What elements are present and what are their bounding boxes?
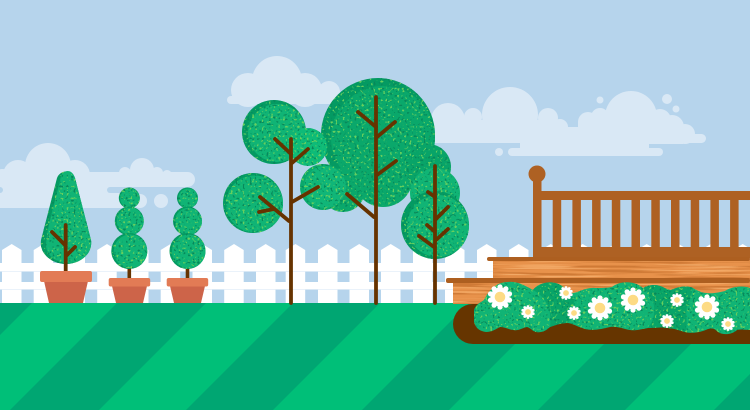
- deck wood planks: [453, 260, 750, 304]
- cloud: upper middle: [227, 56, 340, 107]
- right tree foliage: [401, 144, 469, 259]
- center tree: [321, 78, 435, 303]
- terracotta pot: [167, 278, 208, 303]
- flowers: [488, 284, 735, 331]
- center tree trunk: [347, 97, 396, 303]
- left tree foliage: [223, 100, 346, 233]
- terracotta pot: [40, 271, 92, 303]
- trunk: [186, 265, 189, 279]
- potted ball topiary: middle: [109, 188, 150, 303]
- wooden deck: [446, 166, 750, 304]
- left tree: [223, 100, 346, 303]
- trunk: [128, 265, 131, 279]
- soil bed: [453, 304, 750, 344]
- picket fence: [0, 244, 750, 303]
- cloud: far left: [0, 143, 195, 208]
- deck step edges: [446, 257, 750, 283]
- left tree trunk: [259, 139, 318, 303]
- flower bush: [474, 282, 750, 334]
- cone foliage: [41, 171, 91, 264]
- potted ball topiary: right: [167, 188, 208, 303]
- ball foliage: [111, 188, 147, 269]
- center tree foliage: [321, 78, 435, 212]
- bush foliage: [474, 282, 750, 334]
- cone trunk: [52, 225, 75, 271]
- cloud: right pair: [431, 87, 706, 156]
- terracotta pot: [109, 278, 150, 303]
- right tree: [401, 144, 469, 303]
- ball foliage: [170, 188, 206, 269]
- deck railing: [528, 166, 750, 258]
- potted cone topiary: [40, 171, 92, 303]
- lawn: [0, 303, 750, 410]
- right tree trunk: [419, 166, 448, 303]
